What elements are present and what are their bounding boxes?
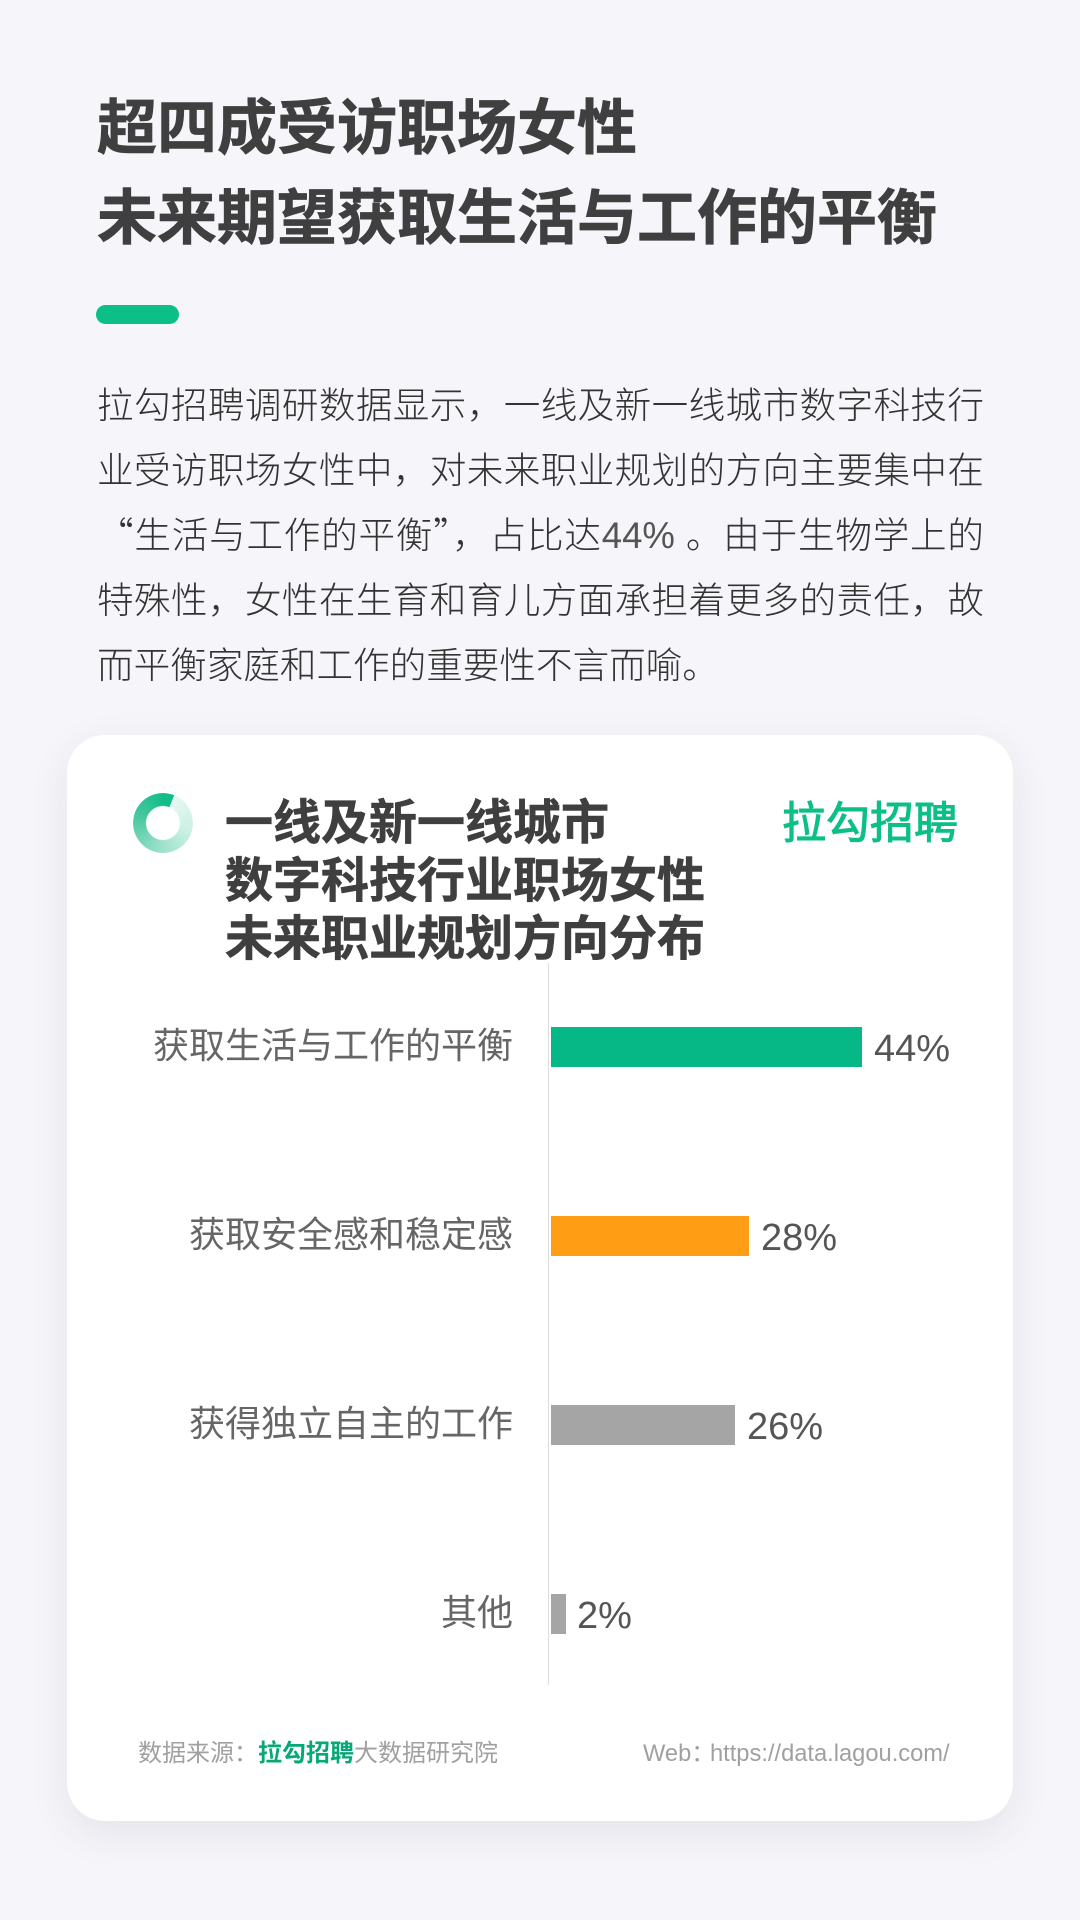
footer web: Web：https://data.lagou.com/ [643, 1741, 950, 1767]
card heading [225, 797, 705, 966]
bar 2% [551, 1594, 566, 1634]
bar chart [153, 1025, 950, 1637]
title: 未来期望获取生活与工作的平衡 [97, 185, 937, 252]
chart axis [548, 963, 549, 1685]
accent bar [96, 305, 179, 324]
row label: independent: 获得独立自主的工作 [189, 1403, 513, 1444]
panel: chart card [67, 735, 1013, 1821]
bar 28% [551, 1216, 749, 1256]
intro text block: 特殊性，女性在生育和育儿方面承担着更多的责任，故 [97, 580, 984, 621]
intro text block: 而平衡家庭和工作的重要性不言而喻。 [97, 645, 719, 686]
card heading: 未来职业规划方向分布 [225, 913, 705, 966]
intro text block: “生活与工作的平衡”，占比达44% 。由于生物学上的 [97, 506, 984, 559]
row label: security: 获取安全感和稳定感 [189, 1214, 513, 1255]
value 28%: 28% [761, 1217, 837, 1259]
brand logo text: 拉勾招聘 [782, 799, 958, 848]
intro text block [97, 385, 984, 686]
title [97, 95, 937, 252]
row label: other: 其他 [441, 1592, 513, 1633]
intro text block: 拉勾招聘调研数据显示，一线及新一线城市数字科技行 [97, 385, 984, 426]
bar 26% [551, 1405, 735, 1445]
row label: balance: 获取生活与工作的平衡 [153, 1025, 513, 1066]
footer source: 数据来源：拉勾招聘大数据研究院 [138, 1740, 498, 1767]
value 2%: 2% [577, 1595, 632, 1637]
icon: gradient ring [133, 793, 193, 853]
title: 超四成受访职场女性 [97, 95, 637, 162]
card heading: 数字科技行业职场女性 [225, 855, 705, 908]
card heading: 一线及新一线城市 [225, 797, 609, 850]
value 44%: 44% [874, 1028, 950, 1070]
bar 44% [551, 1027, 862, 1067]
intro text block: 业受访职场女性中，对未来职业规划的方向主要集中在 [97, 450, 984, 491]
value 26%: 26% [747, 1406, 823, 1448]
